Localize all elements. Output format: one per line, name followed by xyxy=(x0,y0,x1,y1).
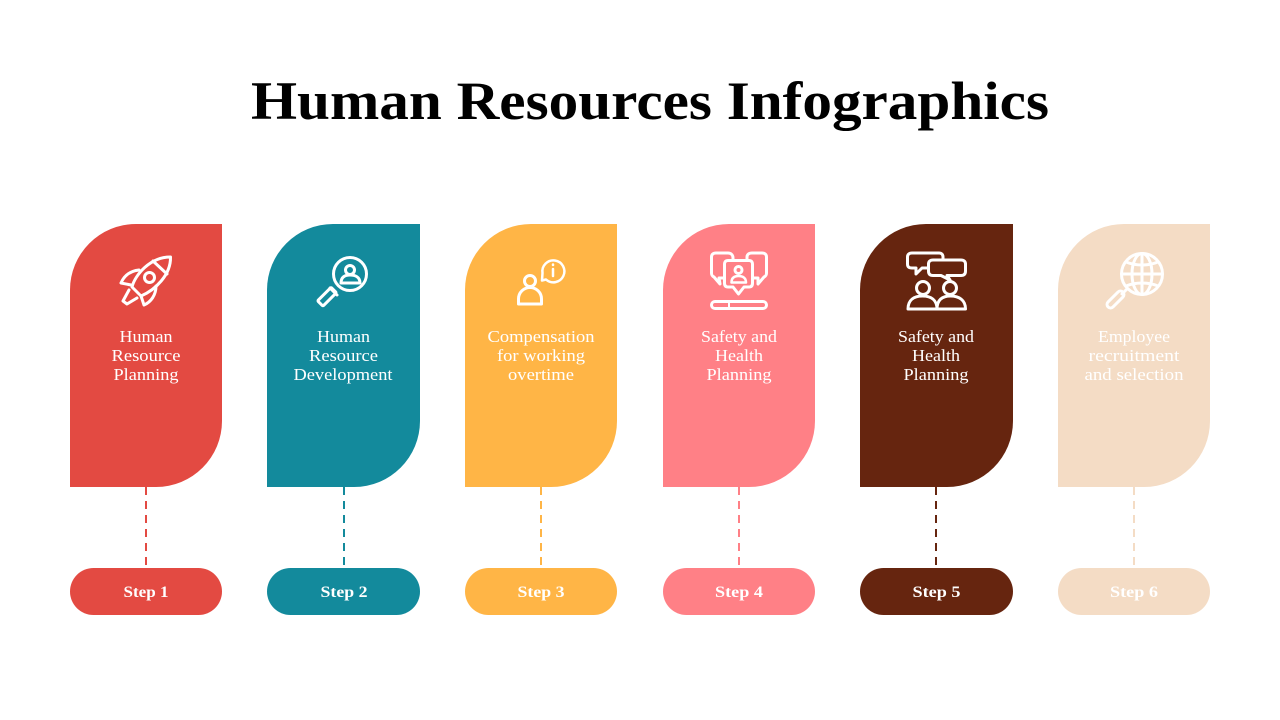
card shape xyxy=(70,224,222,487)
step pill xyxy=(860,568,1013,615)
label: Resource xyxy=(112,346,180,365)
label: recruitment xyxy=(1088,346,1180,365)
step label: Step 6 xyxy=(1110,584,1158,601)
icon: person with info bubble xyxy=(518,260,564,304)
label: Health xyxy=(912,346,961,365)
dashed connector xyxy=(343,487,345,565)
step pill xyxy=(465,568,617,615)
icon: speech bubbles with person xyxy=(712,253,766,308)
step label: Step 4 xyxy=(715,584,763,601)
step label: Step 5 xyxy=(912,584,961,601)
panel: step 2 xyxy=(267,224,420,615)
card shape xyxy=(1058,224,1210,487)
icon: magnifier with person xyxy=(318,258,366,306)
label xyxy=(488,327,594,384)
card shape xyxy=(860,224,1013,487)
dashed connector xyxy=(738,487,740,565)
icon: two people talking xyxy=(908,253,966,309)
label: and selection xyxy=(1084,365,1184,384)
label: Health xyxy=(715,346,764,365)
label: Human xyxy=(120,327,172,346)
label: Safety and xyxy=(701,327,778,346)
step pill xyxy=(1058,568,1210,615)
card shape xyxy=(267,224,420,487)
label: Employee xyxy=(1098,327,1170,346)
icon: globe magnifier xyxy=(1106,254,1162,309)
step pill xyxy=(70,568,222,615)
panel: step 5 xyxy=(860,224,1013,615)
label xyxy=(294,327,393,384)
step pill xyxy=(267,568,420,615)
label xyxy=(701,327,778,384)
panel: step 6 xyxy=(1058,224,1210,615)
step label: Step 1 xyxy=(124,584,168,601)
label xyxy=(1084,327,1184,384)
label: Safety and xyxy=(898,327,975,346)
panel: step 1 xyxy=(70,224,222,615)
dashed connector xyxy=(935,487,937,565)
panel: step 3 xyxy=(465,224,617,615)
card shape xyxy=(465,224,617,487)
label: Planning xyxy=(114,365,178,384)
label: for working xyxy=(497,346,585,365)
step pill xyxy=(663,568,815,615)
label: Planning xyxy=(904,365,968,384)
label: Planning xyxy=(706,365,772,384)
step label: Step 3 xyxy=(518,584,565,601)
label xyxy=(112,327,180,384)
label: overtime xyxy=(508,365,574,384)
label: Resource xyxy=(309,346,378,365)
dashed connector xyxy=(1133,487,1135,565)
label: Compensation xyxy=(488,327,594,346)
icon: rocket xyxy=(121,257,171,305)
panel: step 4 xyxy=(663,224,815,615)
step label: Step 2 xyxy=(320,584,368,601)
dashed connector xyxy=(540,487,542,565)
dashed connector xyxy=(145,487,147,565)
label: Human xyxy=(317,327,370,346)
label: Development xyxy=(294,365,393,384)
card shape xyxy=(663,224,815,487)
title: Human Resources Infographics xyxy=(251,71,1049,131)
label xyxy=(898,327,975,384)
